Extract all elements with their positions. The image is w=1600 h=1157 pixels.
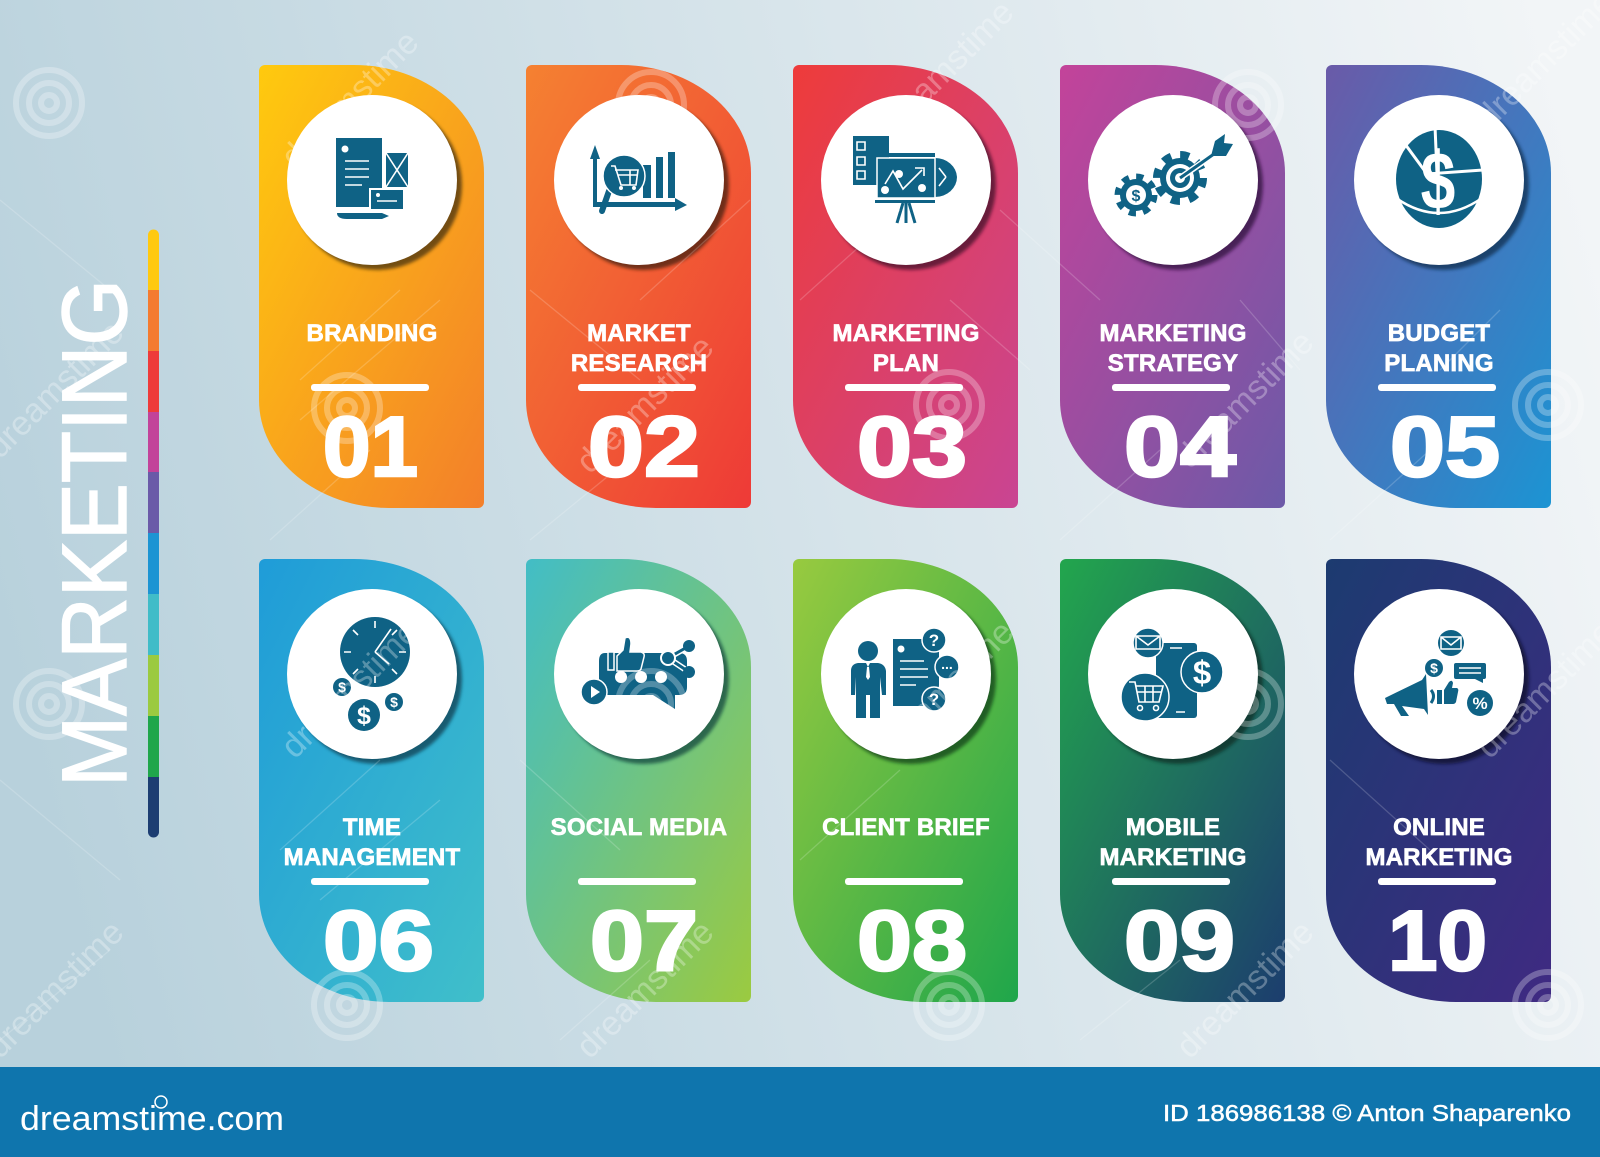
watermark overlay: dreamstime [569,913,721,1066]
number: 10 [1388,894,1487,989]
watermark overlay: dreamstime [869,613,1021,766]
icon: client with brief: ? [929,690,939,709]
icon: clock and coins: $ [338,679,346,695]
number: 07 [590,894,698,989]
icon: presentation board [853,136,957,223]
icon: dollar pie chart: $ [1421,136,1455,227]
divider [311,384,429,391]
card 10: online marketing [1326,559,1551,1002]
divider [1378,878,1496,885]
title: STRATEGY [1108,350,1238,377]
number: 02 [588,400,700,495]
number: 08 [857,894,967,989]
icon: client with brief [851,628,959,718]
card 03: marketing plan [793,65,1018,508]
icon: social chat bubble [581,637,695,709]
icon: gears with target: $ [1132,188,1141,205]
colour index bar [148,230,159,838]
icon: market research chart [590,145,687,211]
watermark overlay: dreamstime [1169,913,1321,1066]
icon: megaphone and online marketing: % [1472,694,1488,713]
card 04: marketing strategy [1060,65,1285,508]
icon: gears with target [1118,134,1233,213]
title: PLAN [873,350,939,377]
card 02: market research [526,65,751,508]
watermark overlay: dreamstime [274,613,426,766]
divider [845,384,963,391]
divider [578,384,696,391]
title [284,814,460,871]
number: 04 [1124,400,1236,495]
icon: client with brief: ? [929,631,939,650]
title: MARKETING [1099,320,1247,347]
icon: client with brief: ... [941,656,953,672]
icon: clock and coins [333,617,410,731]
title [1099,814,1247,871]
footer credit: ID 186986138 © Anton Shaparenko [1163,1100,1571,1126]
watermark overlay: dreamstime [274,23,426,176]
watermark overlay: dreamstime [569,328,721,481]
heading: MARKETING: MARKETING [44,279,146,787]
title: CLIENT BRIEF [822,814,990,841]
card 01: branding [259,65,484,508]
number: 01 [323,400,418,495]
number: 03 [857,400,967,495]
title: MOBILE [1126,814,1220,841]
icon: mobile commerce [1121,628,1223,721]
footer logo: dreamstime.com [20,1100,284,1138]
title: BRANDING [307,320,437,347]
title: PLANING [1384,350,1494,377]
title [1384,320,1494,377]
number: 05 [1390,400,1500,495]
title: TIME [343,814,401,841]
icon: mobile commerce: $ [1193,654,1211,691]
title: MARKET [587,320,691,347]
card 06: time management [259,559,484,1002]
divider [1112,384,1230,391]
divider [311,878,429,885]
divider [845,878,963,885]
footer bar [0,1067,1600,1157]
title: MANAGEMENT [284,844,460,871]
number: 06 [323,894,434,989]
title: ONLINE [1393,814,1485,841]
number: 09 [1124,894,1235,989]
title: RESEARCH [571,350,707,377]
icon: clock and coins: $ [357,702,371,730]
icon: megaphone and online marketing: $ [1430,660,1438,676]
divider [1378,384,1496,391]
title: MARKETING [1099,844,1247,871]
watermark overlay: dreamstime [1169,323,1321,476]
title [571,320,707,377]
card 08: client brief [793,559,1018,1002]
icon: brand documents [336,138,408,219]
icon: megaphone and online marketing [1385,630,1493,716]
divider [1112,878,1230,885]
title [1099,320,1247,377]
title: MARKETING [832,320,980,347]
title: BUDGET [1388,320,1490,347]
title: SOCIAL MEDIA [551,814,727,841]
icon: dollar pie chart [1396,126,1483,228]
title: MARKETING [1365,844,1513,871]
card 07: social media [526,559,751,1002]
title [1365,814,1513,871]
title [832,320,980,377]
icon: clock and coins: $ [390,694,398,710]
card 09: mobile marketing [1060,559,1285,1002]
card 05: budget planing [1326,65,1551,508]
divider [578,878,696,885]
